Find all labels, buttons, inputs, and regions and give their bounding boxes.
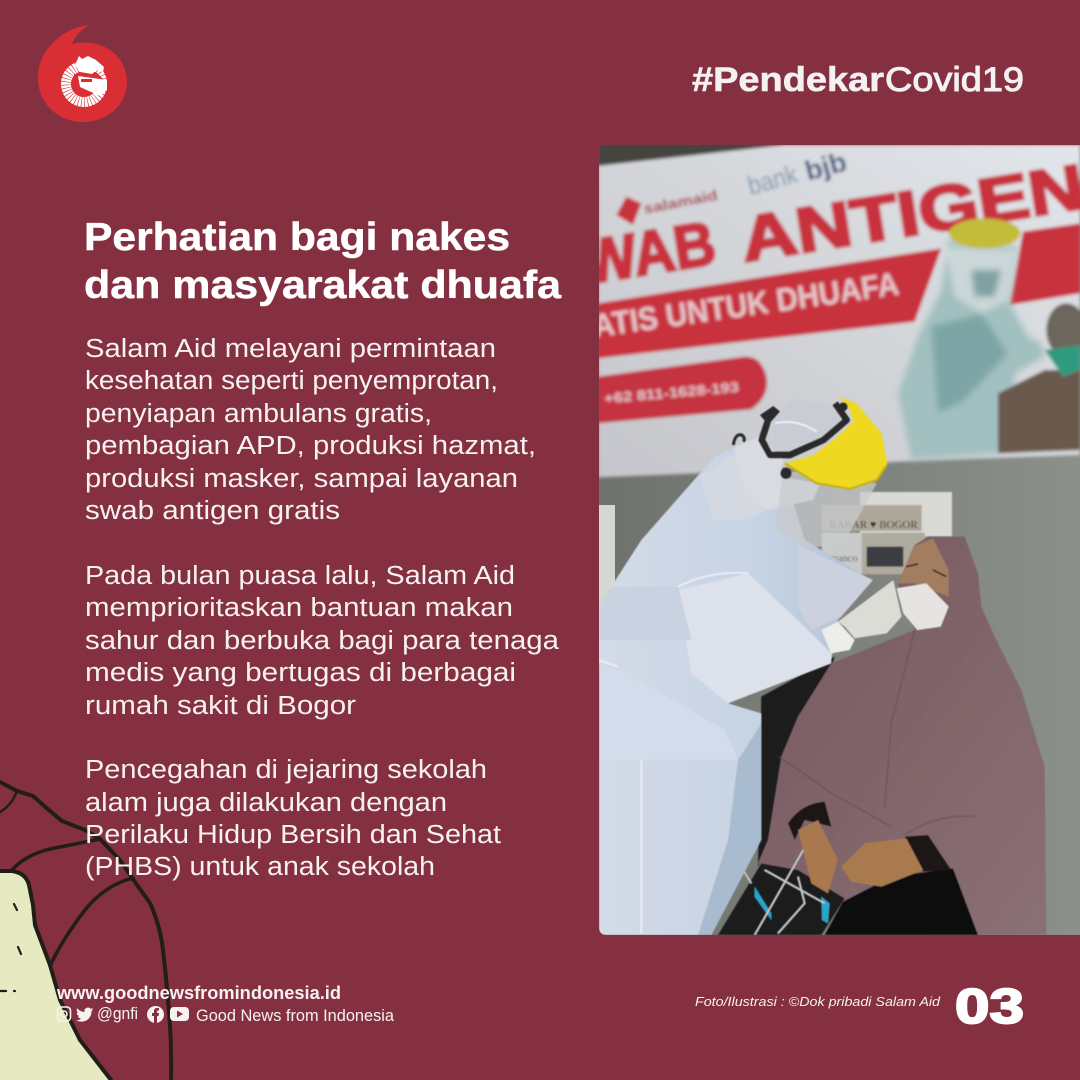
hashtag	[692, 61, 1024, 99]
text block: paragraph 2	[85, 562, 560, 720]
banner: WAB	[578, 209, 720, 298]
text block: paragraph 2: sahur dan berbuka bagi para tenaga	[85, 627, 560, 655]
logo: GNFI	[38, 25, 127, 122]
newspaper poster: RABAR ♥ BOGOR	[829, 519, 918, 531]
banner: bank	[744, 159, 801, 201]
banner: ANTIGEN	[736, 152, 1080, 275]
icon: twitter	[76, 1008, 93, 1022]
text block: paragraph 3	[85, 756, 501, 881]
decorative illustration: bottom-left leaves	[0, 782, 171, 1080]
text block: paragraph 3: (PHBS) untuk anak sekolah	[85, 853, 435, 881]
text block: paragraph 3: Pencegahan di jejaring sekolah	[85, 756, 487, 784]
banner: bjb	[802, 146, 850, 186]
nurse in protective suit	[599, 447, 902, 935]
text block: paragraph 3: Perilaku Hidup Bersih dan Sehat	[85, 821, 501, 849]
text block: paragraph 2: rumah sakit di Bogor	[85, 692, 357, 720]
text block: paragraph 1: pembagian APD, produksi hazmat,	[85, 432, 536, 460]
photo credit: Foto/Ilustrasi : ©Dok pribadi Salam Aid	[695, 995, 941, 1009]
page number: 03	[955, 980, 1024, 1034]
footer: website and social	[56, 983, 395, 1025]
footer: website and social: Good News from Indonesia	[196, 1006, 395, 1025]
hashtag: Covid19	[885, 61, 1024, 99]
photo: swab antigen test	[578, 140, 1080, 940]
text block: paragraph 1: swab antigen gratis	[85, 497, 340, 525]
banner: ATIS UNTUK DHUAFA	[590, 265, 901, 344]
logo emblem: garuda G	[66, 56, 108, 102]
banner: salamaid	[642, 188, 719, 218]
text block: paragraph 2: medis yang bertugas di berbagai	[85, 659, 516, 687]
heading: Perhatian bagi nakes	[84, 216, 510, 259]
text block: paragraph 1: Salam Aid melayani permintaan	[85, 335, 496, 363]
text block: paragraph 1	[85, 335, 536, 525]
banner	[578, 140, 1080, 477]
banner: +62 811-1628-193	[604, 379, 740, 406]
icon: youtube	[170, 1007, 189, 1021]
newspaper poster	[822, 492, 952, 574]
door panel	[599, 505, 615, 665]
icon: instagram	[58, 1007, 70, 1021]
text block: paragraph 2: Pada bulan puasa lalu, Salam Aid	[85, 562, 515, 590]
newspaper poster: manco	[829, 554, 858, 565]
text block: paragraph 3: alam juga dilakukan dengan	[85, 789, 447, 817]
patient	[718, 537, 1046, 935]
wall	[598, 140, 1080, 940]
text block: paragraph 1: penyiapan ambulans gratis,	[85, 400, 432, 428]
face shield and yellow visor	[700, 397, 887, 548]
hashtag: #Pendekar	[692, 61, 884, 99]
text block: paragraph 1: produksi masker, sampai layanan	[85, 465, 518, 493]
text block: paragraph 1: kesehatan seperti penyemprotan,	[85, 367, 498, 395]
heading: dan masyarakat dhuafa	[84, 264, 561, 307]
icon: facebook	[147, 1006, 164, 1023]
footer: website and social: @gnfi	[97, 1005, 138, 1023]
footer: website and social: www.goodnewsfromindonesia.id	[56, 983, 341, 1003]
text block: paragraph 2: memprioritaskan bantuan makan	[85, 594, 513, 622]
heading	[84, 216, 561, 307]
